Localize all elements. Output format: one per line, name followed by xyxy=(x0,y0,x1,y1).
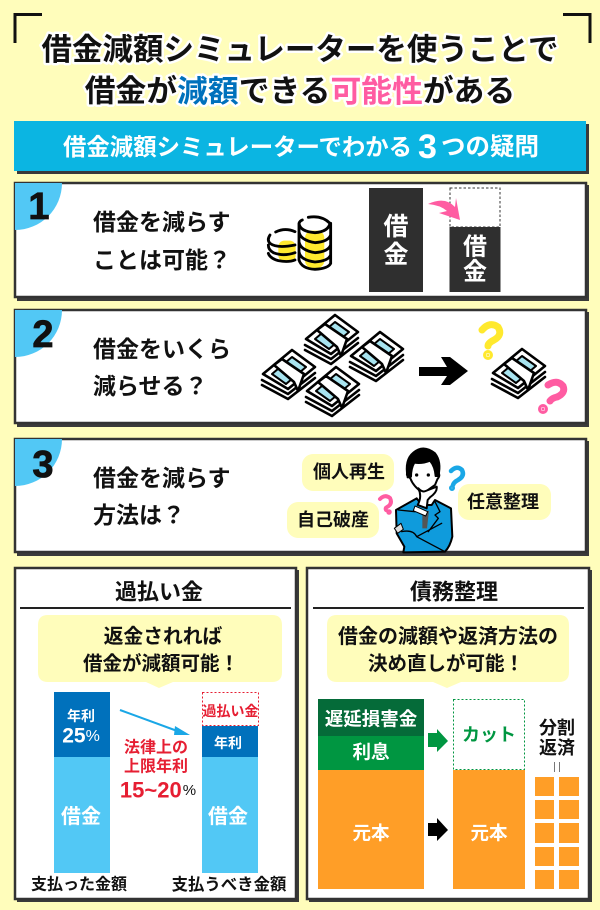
callout: 減額や返済方法: 決め直しが可能！ xyxy=(368,652,524,675)
number badge 3 xyxy=(15,439,62,486)
question text 2 xyxy=(93,336,231,399)
icon: blue question mark xyxy=(451,468,463,489)
callout: 減額や返済方法: 借金の減額や返済方法の xyxy=(338,624,558,648)
question text 2: 借金をいくら xyxy=(93,336,231,362)
label: 支払うべき金額: 支払うべき金額 xyxy=(172,875,287,894)
question text 3: 借金を減らす xyxy=(93,465,231,491)
chart: debt after xyxy=(450,188,500,292)
icon: small pink question mark xyxy=(380,496,391,513)
label: 分割返済: 分割 xyxy=(539,718,575,738)
annotation: legal upper limit xyxy=(120,738,196,802)
chart: paid amount bar: 25% xyxy=(62,724,100,748)
chart: installment squares xyxy=(535,777,579,889)
icon: yellow question mark xyxy=(482,325,500,356)
icon: cash stacks xyxy=(262,315,403,416)
label: 分割返済: 返済 xyxy=(539,738,575,758)
chart: original debt bar: 遅延損害金 xyxy=(325,708,418,730)
bubble: 自己破産 xyxy=(287,502,379,538)
chart: reduced debt bar xyxy=(453,700,525,889)
arrow: green xyxy=(428,729,448,752)
chart: amount due bar: 年利 xyxy=(214,735,242,751)
chart: original debt bar: 利息 xyxy=(352,742,390,762)
question text 3 xyxy=(93,465,231,528)
chart: debt after: 借 xyxy=(463,234,487,260)
icon: coin stacks xyxy=(268,217,331,269)
chart: amount due bar: 過払い金 xyxy=(202,703,258,719)
annotation: legal upper limit: 上限年利 xyxy=(124,756,188,776)
panel: question 3 xyxy=(15,439,589,556)
chart: paid amount bar: 借金 xyxy=(61,805,101,828)
icon: thinking businessman xyxy=(394,448,452,552)
bubble: 個人再生: 個人再生 xyxy=(313,462,385,482)
question text 2: 減らせる？ xyxy=(93,373,208,399)
label: 分割返済 xyxy=(539,718,575,772)
chart: reduced debt bar: 元本 xyxy=(470,822,508,844)
number badge 1: 1 xyxy=(28,186,50,228)
title xyxy=(42,33,558,108)
bubble: 個人再生 xyxy=(302,454,394,491)
chart: amount due bar xyxy=(202,692,258,873)
chart: paid amount bar: 年利 xyxy=(67,708,95,724)
number badge 2: 2 xyxy=(32,314,54,356)
banner: 3つの疑問: 借金減額シミュレーターでわかる3つの疑問 xyxy=(63,128,539,166)
icon: single cash stack xyxy=(492,349,545,398)
label: 支払った金額: 支払った金額 xyxy=(31,874,127,894)
arrow: black xyxy=(428,818,448,841)
number badge 1 xyxy=(15,183,62,230)
panel: 過払い金 xyxy=(15,568,299,902)
bubble: 任意整理: 任意整理 xyxy=(467,492,539,512)
chart: original debt bar xyxy=(318,699,424,889)
heading: 債務整理: 債務整理 xyxy=(410,580,498,604)
arrow: blue down xyxy=(120,710,190,735)
panel: 債務整理 xyxy=(307,568,592,902)
panel: question 1 xyxy=(15,183,589,301)
arrow: black xyxy=(419,357,468,385)
number badge 2 xyxy=(15,310,62,357)
callout: 減額や返済方法 xyxy=(327,615,569,688)
question text 1 xyxy=(93,209,231,273)
divider rule xyxy=(20,607,291,609)
question text 1: ことは可能？ xyxy=(93,247,231,273)
title: 借金減額シミュレーターを使うことで xyxy=(42,33,558,67)
annotation: legal upper limit: 法律上の xyxy=(124,738,188,756)
question text 3: 方法は？ xyxy=(93,502,185,528)
chart: debt before xyxy=(369,188,423,292)
bubble: 自己破産: 自己破産 xyxy=(297,510,369,530)
panel: question 2 xyxy=(15,310,589,427)
annotation: legal upper limit: 15~20% xyxy=(120,778,196,802)
number badge 3: 3 xyxy=(32,444,54,486)
arrow: pink reduction xyxy=(428,198,460,220)
callout: 返金されれば: 借金が減額可能！ xyxy=(83,652,239,675)
question text 1: 借金を減らす xyxy=(93,209,231,235)
callout: 返金されれば: 返金されれば xyxy=(104,626,223,648)
chart: debt after: 金 xyxy=(463,258,487,286)
chart: debt before: 金 xyxy=(383,241,409,269)
callout: 返金されれば xyxy=(38,615,282,688)
chart: original debt bar: 元本 xyxy=(352,822,390,844)
icon: pink question mark xyxy=(542,382,564,410)
bubble: 任意整理 xyxy=(458,484,551,520)
heading: 過払い金: 過払い金 xyxy=(115,580,203,604)
title: 借金が減額できる可能性がある xyxy=(85,74,515,108)
chart: paid amount bar xyxy=(54,692,110,873)
chart: reduced debt bar: カット xyxy=(462,725,516,745)
decorative title brackets xyxy=(15,14,590,43)
divider rule xyxy=(313,607,584,609)
chart: amount due bar: 借金 xyxy=(208,805,248,828)
chart: debt before: 借 xyxy=(383,213,409,241)
banner: 3つの疑問 xyxy=(14,121,589,174)
